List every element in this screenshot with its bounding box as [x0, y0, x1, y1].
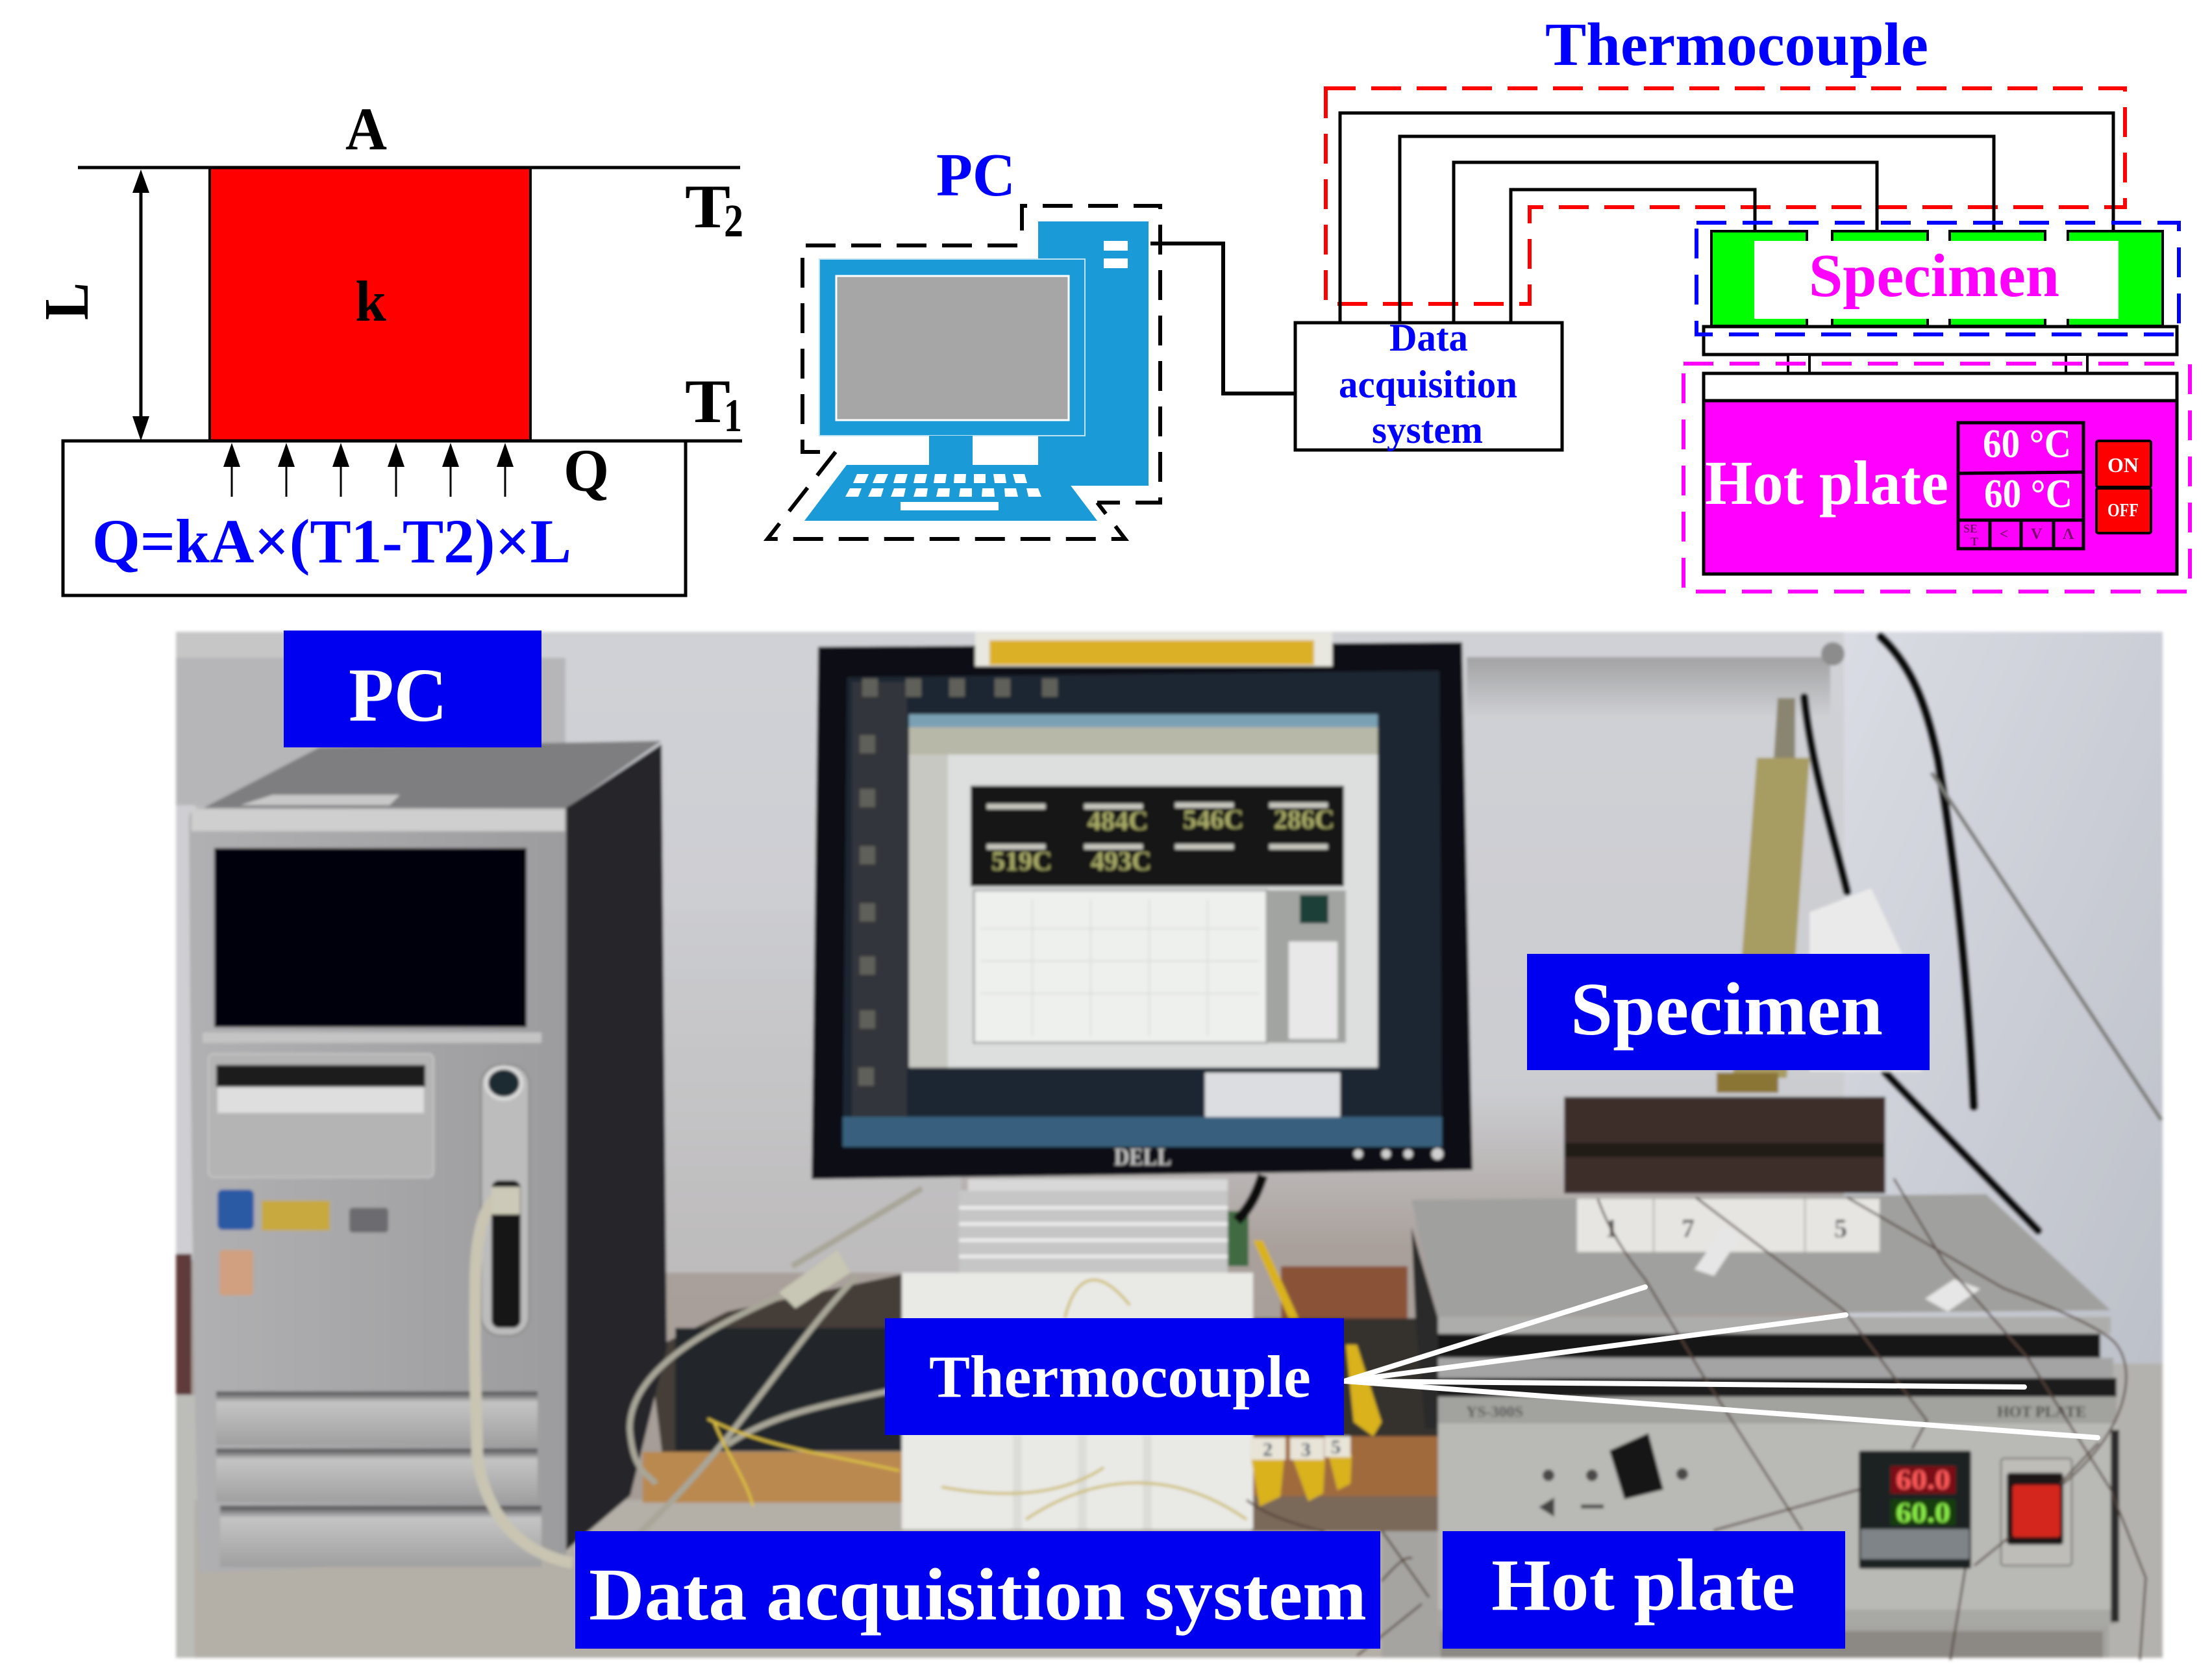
left top band — [176, 632, 286, 658]
side button — [1300, 895, 1328, 923]
desktop left strip — [852, 682, 907, 1117]
top label — [240, 795, 400, 805]
side panel — [1267, 890, 1346, 1043]
label Data acquisition system — [575, 1531, 1380, 1649]
left shelf shade — [176, 658, 565, 807]
box text: system — [1372, 408, 1483, 451]
heading PC: PC — [936, 142, 1015, 209]
left wall — [176, 805, 195, 1260]
heading Thermocouple: Thermocouple — [1545, 11, 1928, 79]
controller buttons: T — [1970, 535, 1978, 548]
bench floor — [195, 1500, 1448, 1658]
yellow wires left — [708, 1419, 899, 1506]
handle brass tip — [1717, 1073, 1778, 1093]
monitor — [819, 259, 1085, 436]
windows sticker — [219, 1250, 253, 1295]
panel: PC icon — [767, 142, 1160, 539]
label L: L — [32, 282, 102, 320]
label T1: 1 — [724, 390, 742, 442]
dark behind right — [1253, 1318, 1438, 1438]
right shelf — [1467, 657, 1830, 718]
red reading: 60.0 — [1896, 1464, 1950, 1495]
hot plate body — [1438, 1397, 2117, 1625]
specimen bricks — [1564, 1097, 1885, 1193]
floppy slot — [216, 1065, 425, 1087]
box text — [1339, 316, 1517, 451]
label T1 — [685, 367, 742, 442]
tower — [1038, 221, 1149, 486]
indicators — [1543, 1468, 1688, 1481]
label T2: 2 — [724, 195, 743, 247]
specimen text: Specimen — [1809, 242, 2059, 310]
readout values: 484C — [1087, 806, 1148, 836]
gray desk cables — [604, 1188, 922, 1565]
panel: hot plate — [1684, 355, 2190, 592]
white pointer lines — [1345, 1287, 2098, 1438]
red dashed outline — [1326, 88, 2125, 304]
thin brown wires — [1247, 1179, 2146, 1660]
on button — [2096, 441, 2151, 487]
controller keypad — [1861, 1529, 1969, 1559]
window title — [909, 714, 1378, 727]
column slot — [491, 1181, 521, 1328]
plate slot — [1438, 1334, 2100, 1358]
red display — [1891, 1466, 1956, 1493]
tower buttons — [1104, 241, 1128, 268]
power button — [486, 1068, 521, 1099]
controller buttons: < — [2000, 526, 2009, 543]
label PC: PC — [349, 653, 447, 738]
floor left — [176, 1395, 208, 1658]
bottom boundary line — [63, 439, 742, 443]
keyboard keys — [845, 474, 1041, 510]
body bottom — [1438, 1610, 2117, 1625]
specimen white centre — [1754, 241, 2119, 319]
label Hot plate — [1443, 1531, 1845, 1649]
tags — [1695, 1227, 1980, 1312]
body label right: HOT PLATE — [1997, 1404, 2086, 1421]
left object — [176, 1254, 192, 1395]
label Thermocouple — [885, 1318, 1344, 1435]
white blocks — [1577, 1199, 1880, 1252]
plot background — [974, 890, 1267, 1043]
readout panel — [971, 786, 1344, 886]
handle spring — [1774, 698, 1795, 760]
temperature readouts — [1983, 422, 2072, 516]
plate body — [1704, 401, 2177, 574]
connector ferrite — [779, 1250, 851, 1308]
floppy panel — [208, 1054, 434, 1177]
plate top — [1704, 373, 2177, 401]
vents — [216, 1392, 538, 1445]
temperature readouts: 60 °C — [1983, 422, 2071, 466]
readout bars — [987, 803, 1328, 849]
temperature controller — [1859, 1451, 1971, 1569]
label k: k — [355, 270, 386, 334]
on button: ON — [2107, 453, 2139, 477]
right lower floor — [2104, 1364, 2163, 1658]
readout values — [991, 805, 1334, 877]
right cables — [1804, 637, 2038, 1231]
block numbers: 7 — [1682, 1214, 1695, 1243]
controller buttons: Λ — [2063, 526, 2074, 543]
unit green connector — [1228, 1211, 1249, 1266]
desk brown right — [1281, 1266, 1408, 1318]
block numbers — [1605, 1214, 1847, 1243]
shelf ball — [1821, 642, 1845, 666]
monitor screen — [843, 671, 1442, 1147]
plot grid — [980, 899, 1260, 1036]
label T2: T — [685, 172, 730, 241]
plate front lip — [1438, 1317, 2111, 1334]
hot plate left side — [1411, 1227, 1438, 1429]
warning sign — [989, 640, 1314, 665]
yellow connectors — [1251, 1240, 1382, 1506]
switch lamp — [2013, 1485, 2060, 1537]
arrow: thickness L — [132, 169, 149, 441]
foam stand — [902, 1273, 1253, 1529]
connecting wire PC to data acquisition — [1150, 244, 1295, 394]
top boundary line — [78, 166, 740, 169]
block numbers: 5 — [1834, 1214, 1847, 1243]
label Q: Q — [564, 438, 609, 505]
hot plate top surface — [1411, 1194, 2111, 1317]
yellow wires — [941, 1280, 1247, 1519]
arrows: heat flow Q — [223, 443, 514, 497]
label T1: T — [685, 367, 730, 436]
panel: heat conduction schematic — [32, 96, 743, 595]
bay lip — [203, 1032, 541, 1043]
readout values: 493C — [1091, 847, 1151, 877]
controller buttons: V — [2031, 526, 2043, 543]
taskbar — [843, 1117, 1442, 1147]
keyboard — [804, 465, 1097, 521]
button column — [481, 1065, 529, 1336]
dashed outline — [767, 206, 1160, 539]
shadow below — [1441, 1631, 2103, 1658]
green reading: 60.0 — [1896, 1497, 1950, 1529]
body top strip — [1438, 1397, 2117, 1423]
window toolbar — [909, 727, 1378, 755]
photo scene — [176, 632, 2163, 1660]
block seams — [1654, 1199, 1805, 1252]
keyboard — [675, 1328, 902, 1451]
monitor bezel — [812, 642, 1473, 1179]
specimen block k — [210, 168, 530, 441]
plate strip — [1438, 1358, 2113, 1378]
block numbers: 1 — [1605, 1214, 1618, 1243]
label Specimen: Specimen — [1571, 968, 1883, 1051]
drive bay — [214, 848, 527, 1027]
monitor buttons — [1354, 1148, 1443, 1160]
right edge of plate — [2111, 1430, 2119, 1622]
floor near plate — [1382, 1493, 2109, 1658]
thermocouple wires — [1340, 113, 2113, 323]
wall — [176, 632, 2163, 1658]
hot plate text: Hot plate — [1705, 448, 1948, 518]
yellow sticker — [262, 1201, 330, 1231]
controller buttons: SE — [1963, 522, 1978, 535]
app window — [909, 714, 1378, 1068]
box outline — [1295, 323, 1562, 450]
formula: Q=kA×(T1-T2)×L — [92, 506, 571, 576]
label Data acquisition system: Data acquisition system — [589, 1553, 1367, 1636]
desktop icons — [858, 679, 1058, 1086]
dark region desk left — [649, 1273, 909, 1455]
wall left of monitor — [662, 909, 961, 1273]
panel icons — [1539, 1497, 1604, 1517]
below wood — [1251, 1496, 1441, 1531]
label T2 — [685, 172, 743, 247]
temperature readouts: 60 °C — [1984, 472, 2072, 516]
brick groove — [1564, 1143, 1885, 1157]
black knob — [1609, 1433, 1663, 1499]
off button: OFF — [2107, 501, 2139, 521]
unit ribs — [959, 1208, 1228, 1256]
PC top lip — [192, 809, 565, 831]
connector — [491, 1187, 520, 1214]
box text: acquisition — [1339, 363, 1517, 406]
label Specimen — [1527, 954, 1930, 1070]
plate dark — [1438, 1378, 2117, 1397]
controller panel — [1958, 423, 2083, 549]
connector numbers: 2 — [1263, 1439, 1273, 1460]
label PC — [284, 631, 541, 747]
data acquisition unit — [959, 1190, 1228, 1273]
green display — [1891, 1499, 1956, 1525]
controller buttons — [1963, 522, 2074, 548]
magenta dashed outline — [1684, 364, 2190, 592]
handle — [1733, 758, 1809, 1078]
connector numbers: 3 — [1301, 1439, 1311, 1460]
panel: thermocouple wiring — [1326, 11, 2125, 323]
panel: data acquisition box — [1295, 316, 1562, 451]
PC cable — [475, 1193, 573, 1563]
right wall — [1844, 632, 2163, 1366]
foam shading — [1013, 1435, 1152, 1529]
gray cable — [1932, 773, 2161, 1120]
unit cap — [968, 1179, 1228, 1191]
DELL logo: DELL — [1114, 1143, 1171, 1171]
readout values: 519C — [991, 847, 1052, 877]
connector labels — [1250, 1436, 1350, 1460]
side legend — [1289, 942, 1337, 1039]
floppy silver — [217, 1087, 424, 1113]
switch plate — [2001, 1458, 2072, 1566]
PC tower side — [560, 744, 667, 1556]
wood right — [1253, 1436, 1438, 1496]
warning sign backing — [975, 632, 1332, 666]
PC tower top — [204, 741, 662, 808]
legs — [1788, 355, 2087, 373]
hp badge — [349, 1208, 388, 1232]
plate under specimen — [1704, 327, 2177, 355]
label A: A — [345, 96, 387, 163]
switch — [2007, 1473, 2063, 1545]
specimen green blocks — [1711, 231, 2163, 326]
blue dashed outline — [1696, 223, 2179, 334]
panel: laboratory photograph — [176, 631, 2163, 1660]
popup — [1205, 1073, 1340, 1117]
off button — [2096, 488, 2151, 533]
readout values: 546C — [1183, 805, 1243, 835]
intel sticker — [217, 1190, 254, 1230]
connector numbers: 5 — [1331, 1436, 1341, 1458]
wood left — [643, 1452, 902, 1503]
connector numbers — [1263, 1436, 1341, 1460]
panel: specimen — [1696, 223, 2179, 355]
monitor neck — [929, 436, 973, 465]
PC tower front — [189, 808, 566, 1573]
heater box — [63, 441, 686, 595]
label Thermocouple: Thermocouple — [929, 1343, 1311, 1410]
body label: YS-300S — [1466, 1404, 1523, 1421]
screen — [836, 276, 1069, 420]
readout values: 286C — [1274, 805, 1334, 835]
white plug — [1809, 888, 1922, 1071]
monitor cable — [1237, 1175, 1263, 1221]
label Hot plate: Hot plate — [1491, 1545, 1795, 1626]
box text: Data — [1389, 316, 1468, 359]
window left — [909, 755, 948, 1068]
